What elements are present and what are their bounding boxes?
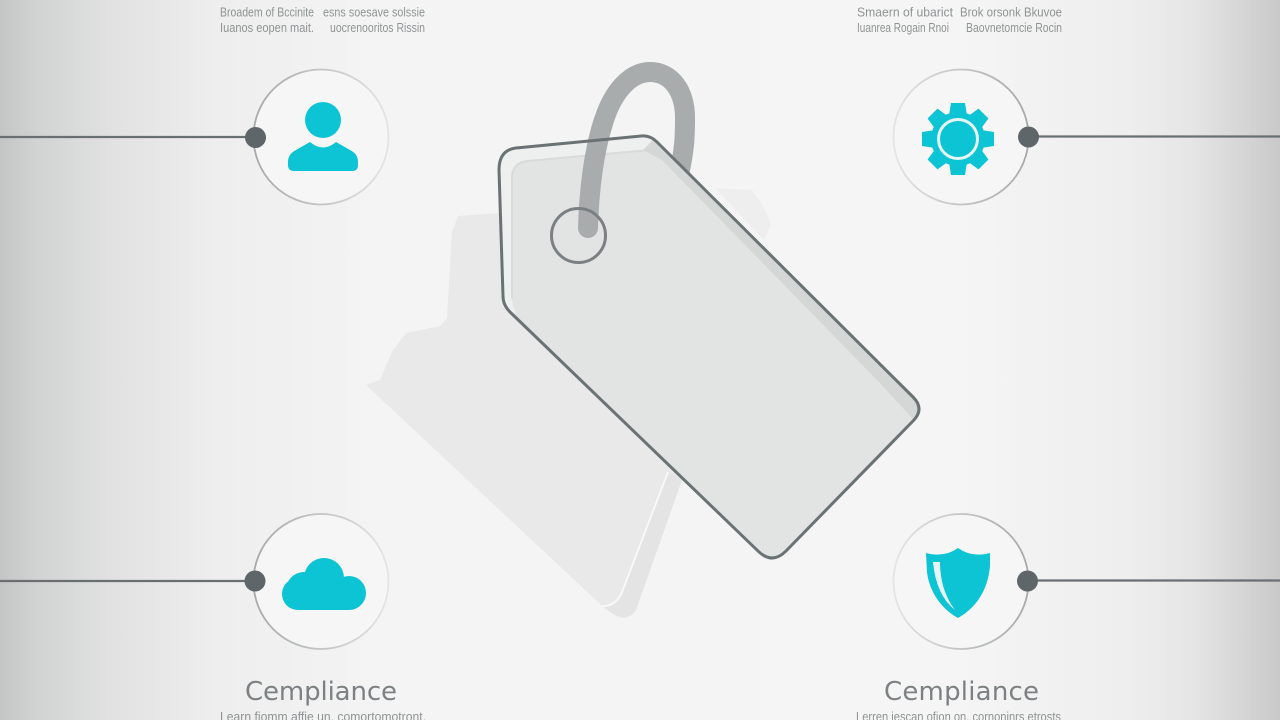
connector line <box>0 136 248 138</box>
tag light rim <box>499 136 662 314</box>
text block: top right: Brok orsonk Bkuvoe <box>960 6 1062 20</box>
text block: top left: Iuanos eopen mait. <box>220 21 314 35</box>
icon: user <box>288 102 358 171</box>
circle <box>254 70 388 204</box>
text block: top right <box>857 6 1062 35</box>
text block: top left: esns soesave solssie <box>323 6 425 20</box>
text block: top left <box>220 6 425 35</box>
text block: top right: Smaern of ubarict <box>857 6 953 20</box>
connector dot <box>1018 126 1039 148</box>
node: gear, top right <box>894 70 1280 204</box>
node: cloud, bottom left <box>0 514 388 649</box>
icon: shield <box>926 548 990 618</box>
string front segment <box>588 120 604 228</box>
connector line <box>1035 135 1280 138</box>
front price tag <box>499 120 919 558</box>
connector line <box>1035 579 1280 582</box>
circle <box>254 514 388 649</box>
back tag shadow shape <box>366 188 771 618</box>
text block: top left: uocrenooritos Rissin <box>330 21 425 35</box>
connector dot <box>244 570 266 592</box>
connector line <box>0 580 248 582</box>
tag outline <box>499 136 919 558</box>
connector dot <box>245 127 266 148</box>
connector dot <box>1017 570 1038 592</box>
heading: bottom left: Cempliance <box>245 677 397 707</box>
tag face <box>499 136 919 558</box>
text block: top left: Broadem of Bccinite <box>220 6 314 20</box>
tag hole <box>552 208 606 262</box>
text block: top right: Baovnetomcie Rocin <box>966 21 1062 35</box>
text block: top right: Iuanrea Rogain Rnoi <box>857 21 949 35</box>
tag inner edge <box>512 150 650 298</box>
circle <box>894 70 1028 204</box>
string loop behind tag <box>588 72 685 228</box>
icon: cloud <box>282 558 366 610</box>
circle <box>894 514 1028 649</box>
tag shaded band <box>643 139 918 419</box>
icon: gear <box>922 103 994 175</box>
heading: bottom right: Cempliance <box>884 677 1039 707</box>
node: shield, bottom right <box>894 514 1280 649</box>
node: user, top left <box>0 70 388 204</box>
